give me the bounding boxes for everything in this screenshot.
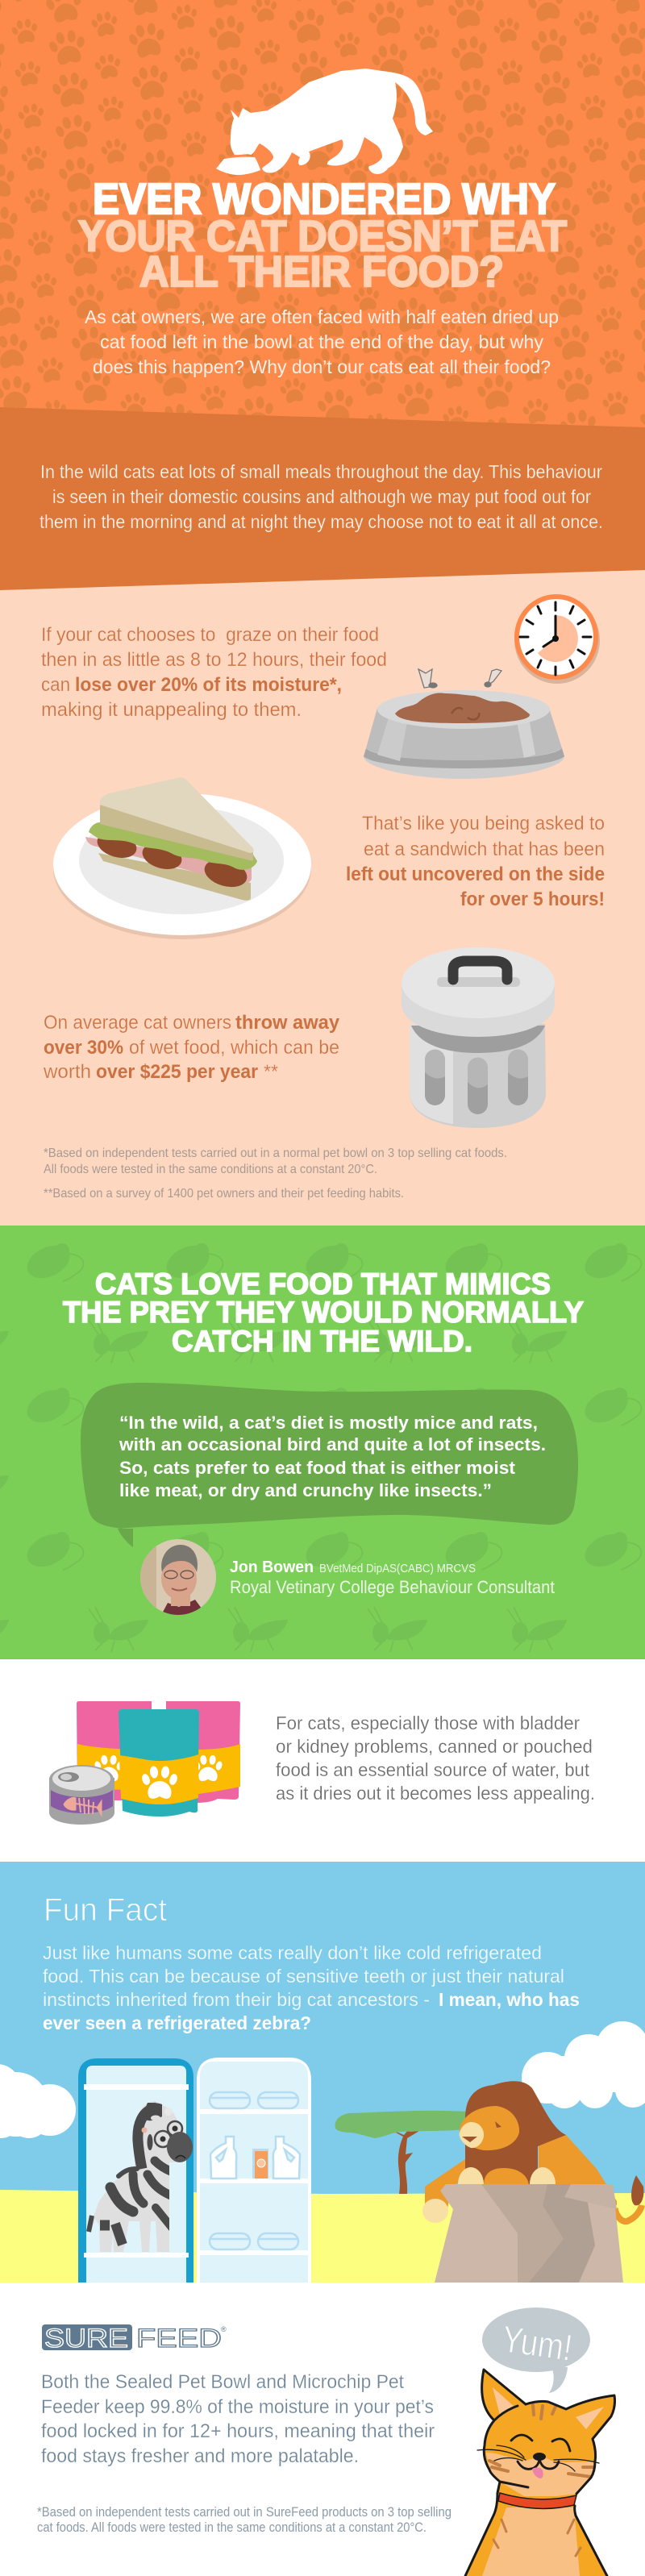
- footnotes: [44, 1147, 507, 1201]
- ground: [0, 2190, 645, 2283]
- text: SureFeed benefit: [41, 2371, 435, 2467]
- text: sandwich comparison: for over 5 hours!: [460, 888, 605, 910]
- fun fact text: instincts inherited from their big cat ancestors -: [43, 1989, 430, 2010]
- fridge body: [197, 2058, 311, 2283]
- title: ALL THEIR FOOD?: [139, 248, 504, 296]
- footnotes: **Based on a survey of 1400 pet owners and their pet feeding habits.: [44, 1187, 404, 1201]
- panel: wild cats band: [0, 407, 645, 590]
- text: wet food waste: [43, 1012, 340, 1083]
- text: moisture loss: If your cat chooses to graze on their food: [41, 624, 379, 646]
- speech bubble: Yum: [482, 2308, 590, 2393]
- footnotes: *Based on independent tests carried out in a normal pet bowl on 3 top selling cat foods.: [44, 1147, 507, 1160]
- band text: In the wild cats eat lots of small meals throughout the day. This behaviour: [40, 461, 602, 482]
- title: EVER WONDERED WHY: [93, 175, 556, 223]
- quote text: So, cats prefer to eat food that is either moist: [119, 1458, 516, 1478]
- food containers: [210, 2092, 298, 2249]
- attribution: Jon Bowen: [230, 1559, 314, 1576]
- cloud: left: [0, 2064, 76, 2138]
- intro text: cat food left in the bowl at the end of the day, but why: [100, 331, 544, 352]
- attribution: Royal Vetinary College Behaviour Consultant: [230, 1577, 555, 1597]
- illustration: sandwich on plate: [53, 777, 311, 939]
- footnote: cat foods. All foods were tested in the same conditions at a constant 20°C.: [37, 2520, 427, 2535]
- quote text: “In the wild, a cat’s diet is mostly mice and rats,: [119, 1413, 538, 1433]
- attribution: BVetMed DipAS(CABC) MRCVS: [319, 1562, 476, 1575]
- text: water source: or kidney problems, canned or pouched: [276, 1736, 593, 1757]
- heading: CATCH IN THE WILD.: [172, 1325, 472, 1358]
- cloud: right: [522, 2021, 645, 2108]
- text: wet food waste: **: [264, 1061, 278, 1083]
- fun fact text: I mean, who has: [439, 1989, 580, 2010]
- heading: CATS LOVE FOOD THAT MIMICS: [95, 1267, 551, 1300]
- fun fact text: ever seen a refrigerated zebra?: [43, 2012, 311, 2033]
- text: SureFeed benefit: food locked in for 12+ hours, meaning that their: [41, 2420, 435, 2442]
- icon: food pouches and can: [49, 1701, 240, 1825]
- icon: fish bones: [64, 1797, 102, 1816]
- panel: header: [0, 0, 645, 435]
- footnote: [37, 2505, 452, 2535]
- text: sandwich comparison: [346, 813, 605, 910]
- band text: [40, 461, 603, 532]
- intro text: [85, 306, 559, 377]
- text: moisture loss: can: [41, 674, 70, 696]
- quote text: [119, 1413, 546, 1500]
- logo: SureFeed: [42, 2324, 227, 2353]
- icon: clock: [514, 594, 600, 684]
- logo: SureFeed: SURE: [44, 2324, 128, 2353]
- text: wet food waste: worth: [43, 1061, 91, 1083]
- fun fact text: food. This can be because of sensitive teeth or just their natural: [43, 1966, 564, 1987]
- heading: THE PREY THEY WOULD NORMALLY: [63, 1296, 584, 1329]
- panel: peach background: [0, 564, 645, 1226]
- footnote: *Based on independent tests carried out in SureFeed products on 3 top selling: [37, 2505, 452, 2520]
- fun fact text: Just like humans some cats really don’t like cold refrigerated: [43, 1942, 542, 1963]
- text: water source: For cats, especially those with bladder: [276, 1712, 580, 1733]
- text: sandwich comparison: That’s like you being asked to: [362, 813, 605, 834]
- illustration: happy cat: [465, 2370, 614, 2576]
- panel: SureFeed: [0, 2283, 645, 2576]
- quote text: with an occasional bird and quite a lot of insects.: [119, 1434, 546, 1454]
- fun fact text: [43, 1942, 580, 2033]
- title: [78, 175, 567, 296]
- text: moisture loss: then in as little as 8 to 12 hours, their food: [41, 649, 387, 671]
- acacia tree: [335, 2111, 467, 2194]
- speech bubble: Yum: Yum!: [500, 2317, 575, 2369]
- text: wet food waste: over $225 per year: [96, 1061, 258, 1083]
- text: water source: food is an essential source of water, but: [276, 1759, 589, 1780]
- text: moisture loss: [41, 624, 387, 721]
- text: water source: as it dries out it becomes less appealing.: [276, 1783, 595, 1804]
- text: wet food waste: over 30%: [44, 1037, 123, 1059]
- panel: canned food: [0, 1659, 645, 1862]
- zebra: [89, 2101, 193, 2252]
- photo: Jon Bowen: [140, 1539, 216, 1615]
- attribution: [230, 1559, 555, 1597]
- text: sandwich comparison: eat a sandwich that has been: [364, 839, 605, 860]
- text: water source: [276, 1712, 595, 1804]
- lion: [422, 2081, 643, 2283]
- band text: is seen in their domestic cousins and although we may put food out for: [52, 486, 591, 507]
- text: SureFeed benefit: Feeder keep 99.8% of the moisture in your pet’s: [41, 2396, 434, 2418]
- band text: them in the morning and at night they may choose not to eat it all at once.: [40, 511, 603, 532]
- text: SureFeed benefit: food stays fresher and more palatable.: [41, 2445, 359, 2467]
- text: moisture loss: lose over 20% of its moisture*,: [75, 674, 342, 696]
- text: wet food waste: On average cat owners: [44, 1012, 231, 1034]
- title: YOUR CAT DOESN’T EAT: [78, 212, 567, 260]
- intro text: As cat owners, we are often faced with half eaten dried up: [85, 306, 559, 327]
- icon: white cat silhouette eating from bowl: [216, 69, 433, 175]
- heading: fun fact: Fun Fact: [44, 1892, 167, 1928]
- footnotes: All foods were tested in the same conditions at a constant 20°C.: [44, 1163, 377, 1176]
- panel: fun fact: [0, 1862, 645, 2283]
- icon: rubbish bin: [402, 947, 555, 1128]
- text: wet food waste: of wet food, which can be: [129, 1037, 339, 1059]
- logo: SureFeed: FEED: [136, 2324, 222, 2353]
- text: wet food waste: throw away: [235, 1012, 340, 1034]
- text: sandwich comparison: left out uncovered on the side: [346, 864, 605, 885]
- icon: flies: [418, 669, 501, 688]
- icon: bowl of food: [364, 690, 564, 779]
- panel: prey section: [0, 1226, 645, 1659]
- juice carton: [252, 2149, 268, 2179]
- text: moisture loss: making it unappealing to them.: [41, 699, 302, 721]
- fridge door with zebra: [78, 2058, 194, 2283]
- speech bubble: [81, 1383, 578, 1547]
- logo: SureFeed: ®: [221, 2325, 227, 2333]
- milk bottles: [210, 2137, 300, 2179]
- heading: [63, 1267, 584, 1358]
- quote text: like meat, or dry and crunchy like insects.”: [119, 1480, 492, 1500]
- text: SureFeed benefit: Both the Sealed Pet Bowl and Microchip Pet: [41, 2371, 404, 2393]
- intro text: does this happen? Why don’t our cats eat all their food?: [93, 356, 551, 377]
